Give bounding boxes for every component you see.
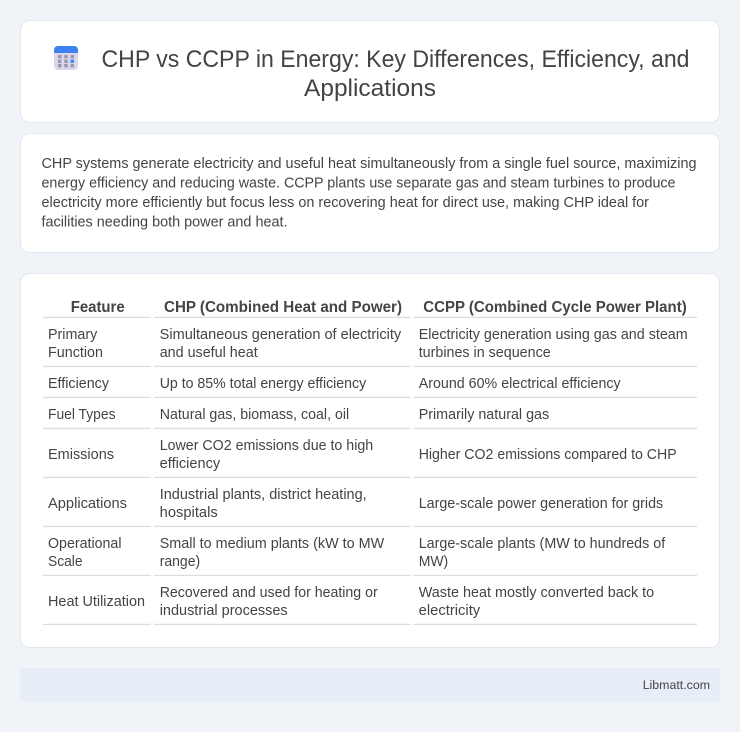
row: operational scale: MW) [419,554,448,570]
text block: summary paragraph: CHP systems generate electricity and useful heat simultaneously from a single fuel source, maximizing [42,156,696,172]
row: primary function: Simultaneous generation of electricity [160,327,402,343]
table header: CCPP (Combined Cycle Power Plant) [423,299,687,316]
row: emissions: Higher CO2 emissions compared to CHP [419,447,677,463]
row: efficiency: Up to 85% total energy efficiency [160,376,367,392]
row: heat utilization: electricity [419,603,481,619]
row: emissions: efficiency [160,456,221,472]
row: emissions: Emissions [48,447,114,463]
row: fuel types: Fuel Types [48,407,116,423]
table header [43,299,697,318]
row: operational scale: Large-scale plants (MW to hundreds of [419,536,666,552]
panel: title card [20,20,720,122]
row: primary function: and useful heat [160,345,258,361]
row: primary function: Function [48,345,103,361]
row: heat utilization: Heat Utilization [48,594,145,610]
row: heat utilization: industrial processes [160,603,288,619]
row: emissions: Lower CO2 emissions due to high [160,438,373,454]
text block: summary paragraph: facilities needing both power and heat. [42,214,288,230]
row: primary function: Primary [48,327,98,343]
row: primary function: Electricity generation using gas and steam [419,327,688,343]
row: efficiency: Around 60% electrical efficiency [419,376,621,392]
row: heat utilization [43,585,697,625]
title [102,46,690,102]
footer [20,668,720,702]
text block: summary paragraph: energy efficiency and reducing waste. CCPP plants use separate gas and steam turbines to produce [42,175,676,191]
row: primary function [43,327,697,367]
row: operational scale: range) [160,554,200,570]
footer: Libmatt.com [643,678,710,692]
row: efficiency: Efficiency [48,376,110,392]
row: efficiency [43,376,697,398]
row: operational scale: Operational [48,536,122,552]
row: applications [43,487,697,527]
title: Applications [304,75,436,102]
row: operational scale: Scale [48,554,82,570]
row: heat utilization: Recovered and used for heating or [160,585,378,601]
row: primary function: turbines in sequence [419,345,551,361]
table header: Feature [71,299,125,316]
row: applications: hospitals [160,505,218,521]
row: fuel types: Primarily natural gas [419,407,549,423]
row: operational scale: Small to medium plants (kW to MW [160,536,384,552]
title: CHP vs CCPP in Energy: Key Differences, Efficiency, and [102,46,690,73]
row: heat utilization: Waste heat mostly converted back to [419,585,654,601]
row: applications: Large-scale power generation for grids [419,496,663,512]
icon: calendar grid [54,46,78,70]
table header: CHP (Combined Heat and Power) [164,299,402,316]
row: emissions [43,438,697,478]
panel: summary [20,134,720,252]
row: applications: Applications [48,496,127,512]
row: operational scale [43,536,697,576]
panel: comparison table [20,274,720,648]
row: fuel types: Natural gas, biomass, coal, oil [160,407,349,423]
text block: summary paragraph: electricity more efficiently but focus less on recovering heat for direct use, making CHP ideal for [42,195,649,211]
text block: summary paragraph [42,156,696,230]
row: fuel types [43,407,697,429]
row: applications: Industrial plants, district heating, [160,487,367,503]
